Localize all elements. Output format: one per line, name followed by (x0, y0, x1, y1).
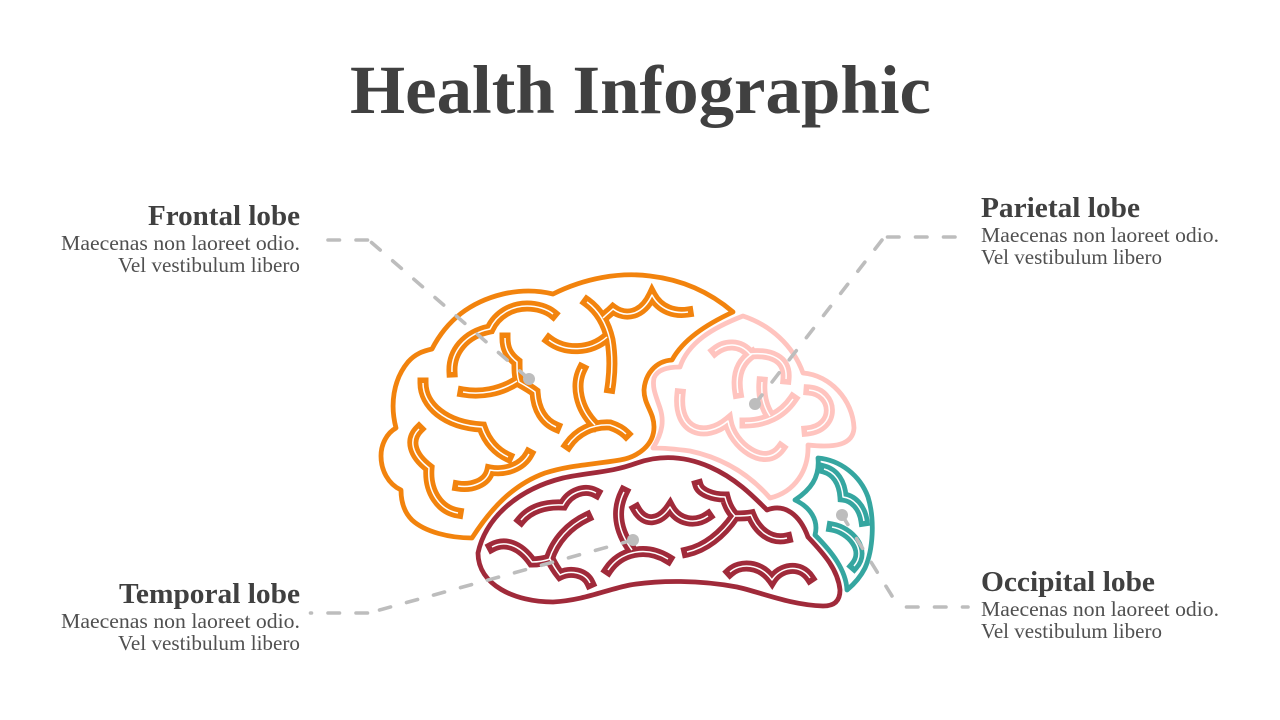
brain illustration (381, 275, 872, 606)
callout: parietal lobe: Vel vestibulum libero (981, 245, 1162, 269)
leader: temporal lobe (310, 534, 639, 613)
callout: temporal lobe (61, 578, 300, 655)
callout: occipital lobe: Vel vestibulum libero (981, 619, 1162, 643)
callout: frontal lobe (61, 200, 300, 277)
callout: occipital lobe: Occipital lobe (981, 566, 1155, 598)
callout: frontal lobe: Frontal lobe (148, 200, 300, 232)
leader: parietal lobe (749, 237, 957, 410)
temporal lobe (478, 458, 840, 606)
leader: frontal lobe (328, 240, 535, 385)
parietal lobe (653, 316, 854, 498)
callout: temporal lobe: Maecenas non laoreet odio. (61, 609, 300, 633)
callout: parietal lobe: Maecenas non laoreet odio. (981, 223, 1219, 247)
callout: frontal lobe: Vel vestibulum libero (118, 253, 300, 277)
leader: occipital lobe (836, 509, 968, 607)
callout: occipital lobe (981, 566, 1219, 643)
callout: parietal lobe: Parietal lobe (981, 192, 1140, 224)
callout: frontal lobe: Maecenas non laoreet odio. (61, 231, 300, 255)
callout: temporal lobe: Vel vestibulum libero (118, 631, 300, 655)
occipital lobe (795, 458, 872, 590)
callout: parietal lobe (981, 192, 1219, 269)
callout: temporal lobe: Temporal lobe (119, 578, 300, 610)
title: Health Infographic (350, 52, 931, 128)
callout: occipital lobe: Maecenas non laoreet odio. (981, 597, 1219, 621)
frontal lobe (381, 275, 733, 538)
